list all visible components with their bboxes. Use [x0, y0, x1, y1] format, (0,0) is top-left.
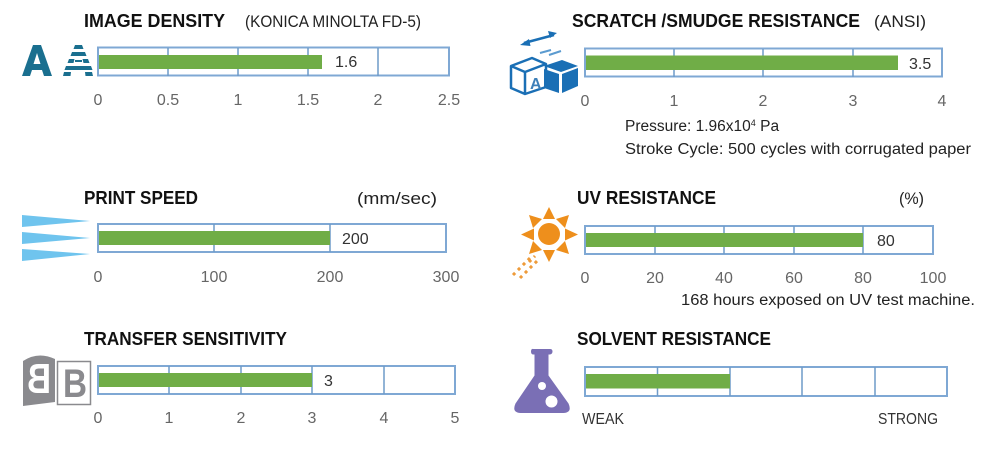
panel: image density — [22, 11, 460, 109]
panel: UV resistance — [513, 188, 975, 309]
icon: solid and striped letter A — [22, 45, 93, 76]
note: exposure: 168 hours exposed on UV test machine. — [681, 292, 975, 309]
icon: sun with UV rays — [513, 207, 578, 278]
heading: print speed: PRINT SPEED — [84, 188, 198, 208]
panel: print speed — [22, 188, 459, 286]
panel: transfer sensitivity — [23, 329, 460, 427]
panel: scratch and smudge resistance — [511, 11, 971, 158]
bar chart: 3 on a 0 to 5 scale: 5 — [451, 410, 460, 427]
bar chart: 80 on a 0 to 100 scale — [581, 226, 946, 287]
bar chart: 1.6 on a 0 to 2.5 scale — [94, 48, 460, 109]
bar chart: 3 on a 0 to 5 scale: 0 — [94, 410, 103, 427]
bar chart: 3.5 on a 0 to 4 scale — [581, 48, 947, 110]
icon: book with mirrored letter B: B — [63, 362, 87, 406]
bar chart: 80 on a 0 to 100 scale: 0 — [581, 270, 590, 287]
bar chart: 3.5 on a 0 to 4 scale: 2 — [759, 93, 768, 110]
bar chart: 80 on a 0 to 100 scale: 60 — [785, 270, 803, 287]
panel: solvent resistance — [514, 329, 947, 428]
bar chart: weak to strong scale: STRONG — [878, 411, 938, 428]
bar chart: 80 on a 0 to 100 scale: 100 — [920, 270, 946, 287]
unit: Konica Minolta FD-5: (KONICA MINOLTA FD-5) — [245, 12, 421, 31]
bar chart: 3 on a 0 to 5 scale: 1 — [165, 410, 174, 427]
bar chart: weak to strong scale: WEAK — [582, 411, 624, 428]
unit: percent: (%) — [899, 189, 924, 208]
bar chart: 1.6 on a 0 to 2.5 scale: 1.5 — [297, 92, 319, 109]
note: test conditions: Pa — [756, 118, 779, 135]
bar chart: weak to strong scale — [582, 367, 947, 428]
unit: ANSI: (ANSI) — [874, 12, 926, 31]
bar chart: 1.6 on a 0 to 2.5 scale: 2 — [374, 92, 383, 109]
bar chart: 1.6 on a 0 to 2.5 scale: 2.5 — [438, 92, 460, 109]
heading: image density: IMAGE DENSITY — [84, 11, 225, 31]
bar chart: 3.5 on a 0 to 4 scale: 3 — [849, 93, 858, 110]
unit: mm per second: (mm/sec) — [357, 189, 437, 208]
bar chart: 3.5 on a 0 to 4 scale: 1 — [670, 93, 679, 110]
bar chart: 1.6 on a 0 to 2.5 scale: 1 — [234, 92, 243, 109]
bar chart: 1.6 on a 0 to 2.5 scale: 1.6 — [335, 54, 357, 71]
bar chart: 200 on a 0 to 300 scale: 100 — [201, 269, 227, 286]
heading: scratch smudge resistance: SCRATCH /SMUDGE RESISTANCE — [572, 11, 860, 31]
bar chart: 80 on a 0 to 100 scale: 20 — [646, 270, 664, 287]
bar chart: 80 on a 0 to 100 scale: 80 — [877, 233, 895, 250]
icon: book with mirrored letter B: B — [27, 355, 51, 402]
note: test conditions — [625, 118, 971, 158]
note: test conditions: Pressure: 1.96x10 — [625, 118, 751, 135]
note: test conditions: Stroke Cycle: 500 cycles with corrugated paper — [625, 141, 971, 158]
icon: book with mirrored letter B — [23, 355, 90, 406]
heading: solvent resistance: SOLVENT RESISTANCE — [577, 329, 771, 349]
icon: flask — [514, 349, 570, 413]
bar chart: 200 on a 0 to 300 scale — [94, 224, 459, 286]
bar chart: 3 on a 0 to 5 scale — [94, 366, 460, 427]
bar chart: 3 on a 0 to 5 scale: 2 — [237, 410, 246, 427]
bar chart: 3 on a 0 to 5 scale: 4 — [380, 410, 389, 427]
bar chart: 3.5 on a 0 to 4 scale: 4 — [938, 93, 947, 110]
bar chart: 200 on a 0 to 300 scale: 0 — [94, 269, 103, 286]
note: test conditions: 4 — [751, 118, 756, 128]
bar chart: 200 on a 0 to 300 scale: 200 — [342, 231, 369, 248]
icon: speed wedges — [22, 215, 90, 261]
icon: rubbing cubes — [511, 31, 578, 94]
bar chart: 1.6 on a 0 to 2.5 scale: 0.5 — [157, 92, 179, 109]
bar chart: 80 on a 0 to 100 scale: 80 — [854, 270, 872, 287]
bar chart: 3 on a 0 to 5 scale: 3 — [308, 410, 317, 427]
bar chart: 1.6 on a 0 to 2.5 scale: 0 — [94, 92, 103, 109]
bar chart: 3 on a 0 to 5 scale: 3 — [324, 373, 333, 390]
icon: rubbing cubes: A — [530, 76, 542, 93]
bar chart: 80 on a 0 to 100 scale: 40 — [715, 270, 733, 287]
bar chart: 3.5 on a 0 to 4 scale: 3.5 — [909, 56, 931, 73]
heading: UV resistance: UV RESISTANCE — [577, 188, 716, 208]
heading: transfer sensitivity: TRANSFER SENSITIVITY — [84, 329, 287, 349]
bar chart: 200 on a 0 to 300 scale: 300 — [433, 269, 459, 286]
bar chart: 200 on a 0 to 300 scale: 200 — [317, 269, 343, 286]
bar chart: 3.5 on a 0 to 4 scale: 0 — [581, 93, 590, 110]
